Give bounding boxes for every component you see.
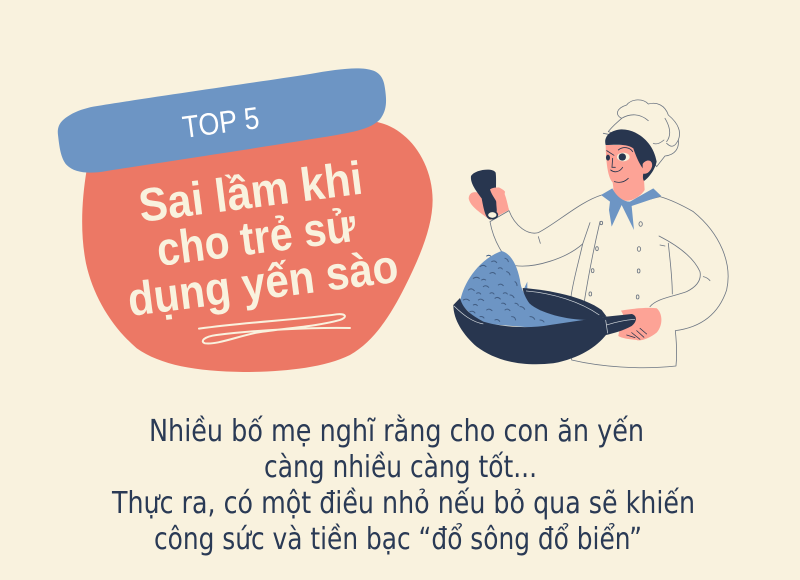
body text: công sức và tiền bạc “đổ sông đổ biển” [154,521,642,557]
body text [111,414,695,557]
neckerchief [601,188,661,230]
banner label: TOP 5: TOP 5 [180,100,261,145]
wok [453,288,636,364]
chef hat [603,100,680,167]
raised hand and pepper shaker [469,170,509,220]
scribble underline [199,314,350,344]
hand on handle [618,308,661,340]
body text: Thực ra, có một điều nhỏ nếu bỏ qua sẽ khiến [111,486,695,521]
face and neck [606,145,645,201]
heading [125,151,401,326]
ear [643,161,652,174]
panel: title badge [58,68,433,372]
eyes and mouth [606,148,633,182]
heading: Sai lầm khi [136,151,365,232]
chef jacket [490,195,728,368]
fingers [627,328,647,339]
food being tossed [460,251,588,328]
hair [605,129,657,181]
heading: cho trẻ sử [154,198,359,276]
illustration: chef with wok [453,100,728,368]
heading: dụng yến sào [125,239,401,326]
body text: càng nhiều càng tốt... [264,450,537,485]
blue banner [58,68,386,173]
red blob [82,121,433,372]
body text: Nhiều bố mẹ nghĩ rằng cho con ăn yến [149,414,644,449]
